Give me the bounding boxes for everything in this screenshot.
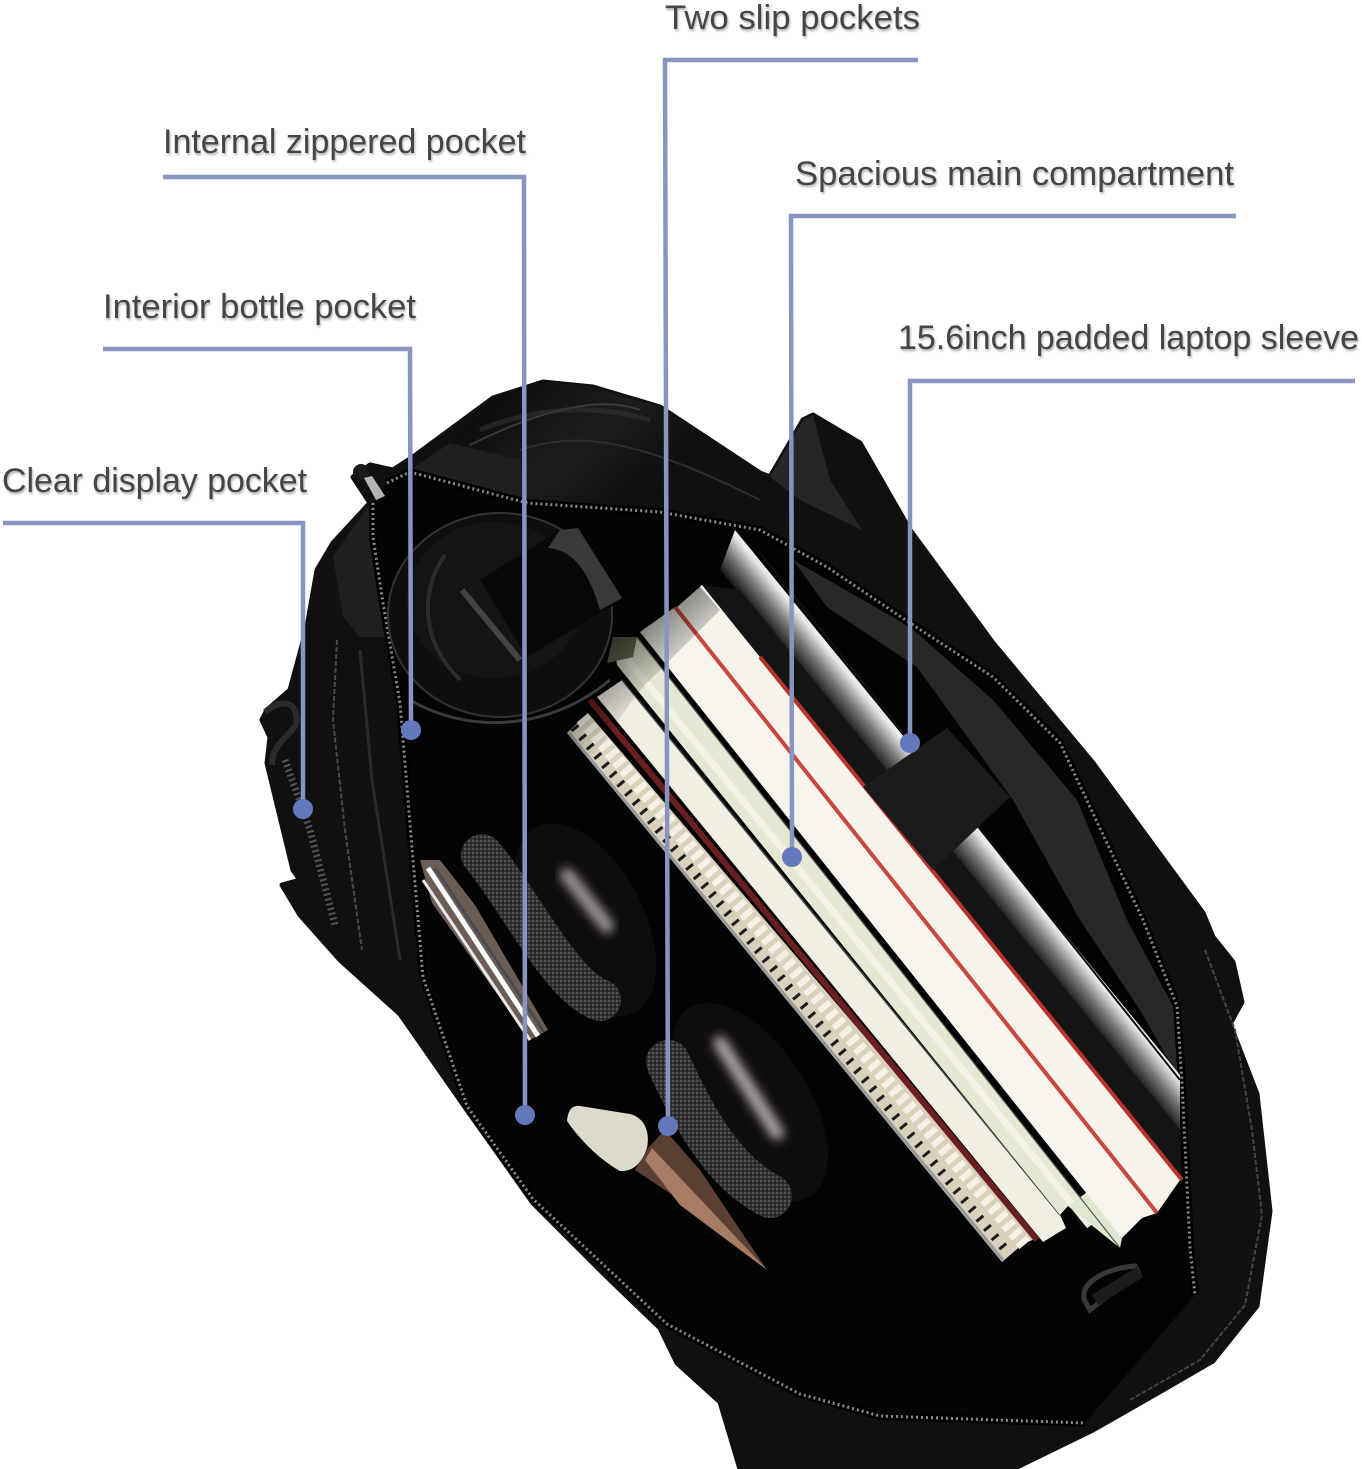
right rim stitching xyxy=(1130,950,1262,1400)
callout: interior bottle pocket: Interior bottle pocket xyxy=(103,288,416,326)
side loop xyxy=(265,703,297,765)
book: red edge pages xyxy=(675,585,1182,1213)
elastic strap xyxy=(863,728,1010,870)
callout: internal zippered pocket: Internal zippered pocket xyxy=(163,123,526,161)
rear handle xyxy=(770,415,862,530)
callout: padded laptop sleeve: 15.6inch padded laptop sleeve xyxy=(898,319,1359,357)
webbing bands xyxy=(333,443,527,637)
satin lining xyxy=(793,560,1180,1080)
laptop sleeve fabric xyxy=(702,585,1182,1180)
zipper pull xyxy=(353,464,385,500)
D-ring xyxy=(1084,1266,1140,1310)
callout: clear display pocket xyxy=(2,462,313,819)
bag outer silhouette xyxy=(262,382,1270,1469)
top flap folds xyxy=(450,382,827,567)
callout: padded laptop sleeve xyxy=(898,319,1359,753)
clear display pocket zipper xyxy=(285,760,335,925)
book: cream pages xyxy=(597,680,1066,1242)
laptop xyxy=(720,530,1180,1130)
eraser xyxy=(567,1106,648,1171)
callout: internal zippered pocket xyxy=(163,123,535,1125)
pen body xyxy=(635,1130,767,1270)
book: green cover xyxy=(607,637,1122,1248)
callout: two slip pockets: Two slip pockets xyxy=(665,0,920,37)
callout: spacious main compartment xyxy=(782,155,1236,867)
left pocket panel stitching xyxy=(333,640,362,950)
notebook with spiral xyxy=(567,700,1037,1262)
headphones: lower ear cup xyxy=(640,976,860,1228)
callout: clear display pocket: Clear display pocket xyxy=(2,462,307,500)
interior compartment xyxy=(373,472,1195,1423)
travel mug lid xyxy=(388,513,622,723)
book: white pages xyxy=(640,607,1157,1238)
callout: spacious main compartment: Spacious main compartment xyxy=(795,155,1234,193)
callout: interior bottle pocket xyxy=(103,288,421,740)
headphones: upper ear cup xyxy=(482,800,686,1040)
bag illustration xyxy=(262,382,1270,1469)
zipper track xyxy=(373,472,1195,1423)
shadow over the book ends xyxy=(560,575,720,760)
holographic card xyxy=(420,860,548,1040)
callout: two slip pockets xyxy=(658,0,920,1136)
